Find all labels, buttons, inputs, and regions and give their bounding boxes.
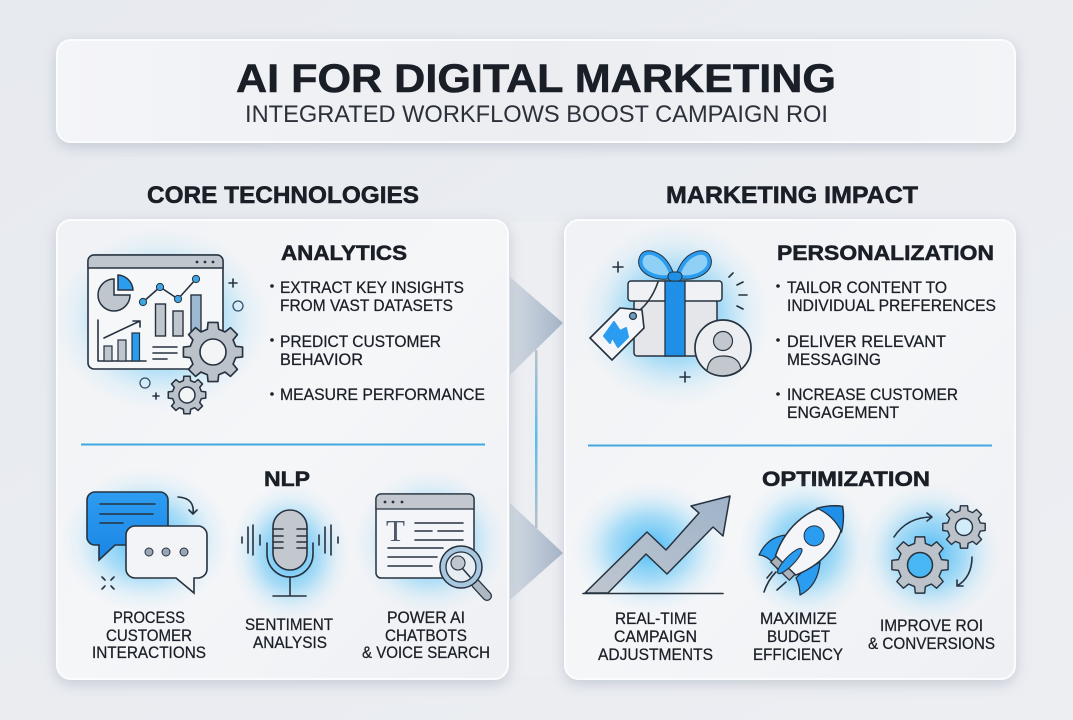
personalization bullet list: MESSAGING (787, 351, 881, 369)
icon: microphone (230, 483, 350, 623)
caption: power AI chatbots and voice search (362, 609, 490, 662)
caption: maximize budget efficiency (753, 610, 843, 664)
icon: analytics dashboard (54, 228, 270, 414)
icon: rocket (739, 476, 871, 620)
analytics bullet list: PREDICT CUSTOMER (280, 333, 441, 351)
analytics bullet list: MEASURE PERFORMANCE (280, 386, 485, 404)
icon: rotating gears (860, 483, 1000, 623)
icon: browser with magnifier: T (386, 513, 405, 548)
caption: real-time campaign adjustments: ADJUSTMENTS (598, 646, 713, 664)
personalization bullet list: TAILOR CONTENT TO (787, 279, 947, 297)
analytics bullet list: EXTRACT KEY INSIGHTS (280, 279, 464, 297)
icon: rising arrow (572, 482, 730, 614)
panel: core technologies (54, 220, 508, 679)
analytics bullet list: BEHAVIOR (280, 351, 363, 369)
caption: power AI chatbots and voice search: CHATBOTS (385, 627, 467, 645)
heading: nlp: NLP (264, 467, 310, 491)
heading: analytics: ANALYTICS (281, 241, 407, 265)
caption: maximize budget efficiency: BUDGET (767, 628, 830, 646)
icon: browser with magnifier (354, 470, 506, 614)
personalization bullet list: DELIVER RELEVANT (787, 333, 946, 351)
arrow: technologies to optimization (510, 503, 563, 600)
caption: power AI chatbots and voice search: & VOICE SEARCH (362, 644, 490, 662)
caption: sentiment analysis: SENTIMENT (245, 616, 333, 634)
personalization bullet list: INDIVIDUAL PREFERENCES (787, 297, 996, 315)
vertical connector line (535, 350, 538, 528)
analytics bullet list (270, 279, 485, 404)
panel: marketing impact (565, 220, 1015, 679)
main title: AI FOR DIGITAL MARKETING (236, 57, 836, 101)
connector band between panels (509, 222, 565, 677)
heading: marketing impact: MARKETING IMPACT (666, 182, 918, 209)
caption: process customer interactions: PROCESS (113, 609, 185, 627)
icon: gift with tag and user (580, 223, 770, 407)
arrow: technologies to personalization (510, 277, 563, 375)
heading: optimization: OPTIMIZATION (762, 467, 930, 491)
caption: power AI chatbots and voice search: POWER AI (387, 609, 465, 627)
caption: process customer interactions: CUSTOMER (106, 627, 192, 645)
caption: improve roi and conversions: & CONVERSIONS (868, 635, 995, 653)
analytics bullet list: FROM VAST DATASETS (280, 297, 453, 315)
title banner (57, 40, 1015, 142)
personalization bullet list: ENGAGEMENT (787, 404, 899, 422)
caption: process customer interactions: INTERACTIONS (92, 644, 206, 662)
heading: core technologies: CORE TECHNOLOGIES (147, 182, 419, 209)
caption: process customer interactions (92, 609, 206, 662)
caption: improve roi and conversions (868, 617, 995, 653)
caption: maximize budget efficiency: EFFICIENCY (753, 646, 843, 664)
subtitle: INTEGRATED WORKFLOWS BOOST CAMPAIGN ROI (245, 101, 828, 128)
caption: sentiment analysis (245, 616, 333, 652)
heading: personalization: PERSONALIZATION (777, 241, 994, 265)
personalization bullet list (776, 279, 996, 422)
icon: chat bubbles (61, 468, 231, 612)
personalization bullet list: INCREASE CUSTOMER (787, 386, 958, 404)
caption: real-time campaign adjustments: REAL-TIME (615, 610, 697, 628)
caption: improve roi and conversions: IMPROVE ROI (880, 617, 983, 635)
caption: sentiment analysis: ANALYSIS (253, 634, 327, 652)
caption: real-time campaign adjustments: CAMPAIGN (614, 628, 697, 646)
caption: maximize budget efficiency: MAXIMIZE (760, 610, 837, 628)
caption: real-time campaign adjustments (598, 610, 713, 664)
